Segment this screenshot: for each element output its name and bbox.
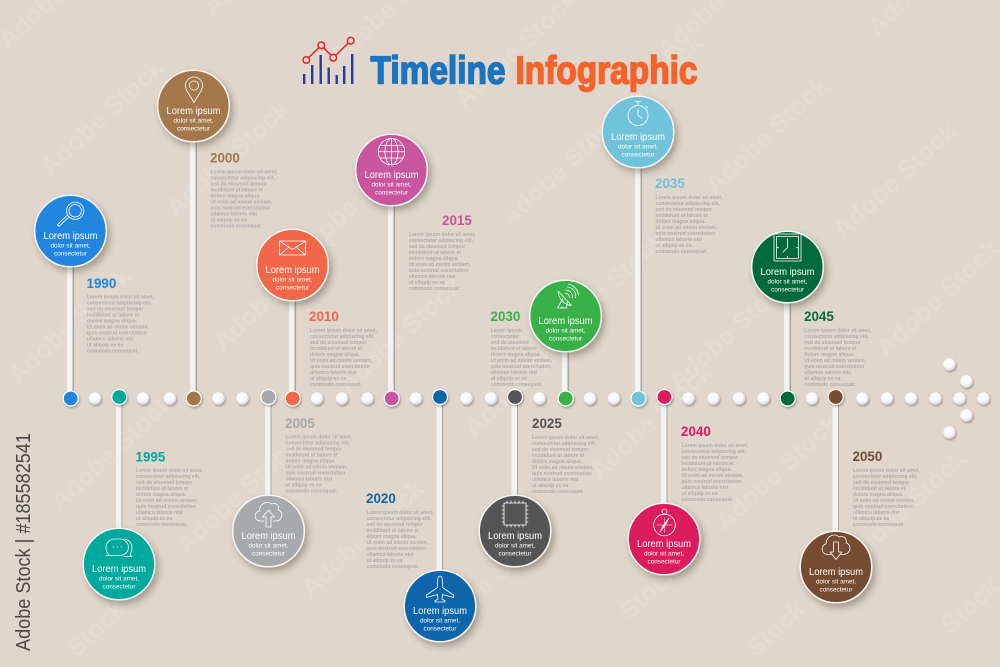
- milestone 2010: consectetur: [276, 284, 310, 292]
- watermark pattern: Adobe Stock: [838, 445, 972, 572]
- text block 2035: ut aliquip ex ea: [656, 243, 692, 249]
- text block 2025: sed do eiusmod tempor: [532, 447, 588, 453]
- text block 2045: ullamco laboris nisi: [804, 370, 852, 376]
- text block 2025: ullamco laboris nisi: [532, 477, 579, 483]
- text block 1995: incididunt ut labore et: [136, 486, 189, 492]
- watermark pattern: Adobe Stock: [333, 272, 467, 399]
- text block 1995: commodo consequat.: [136, 522, 188, 528]
- milestone 2010: [257, 229, 328, 301]
- icon: chat bubbles: [106, 539, 132, 556]
- icon: cloud download: [822, 535, 850, 560]
- text block 2015: ut aliquip ex ea: [409, 280, 445, 286]
- text block 2050: consectetur adipiscing elit,: [853, 474, 918, 480]
- milestone 2025: dolor sit amet,: [495, 542, 535, 550]
- milestone 2045: Lorem ipsum: [760, 267, 814, 278]
- text block 2025: commodo consequat.: [532, 489, 584, 495]
- watermark pattern: Adobe Stock: [35, 54, 169, 181]
- text block 2050: ut aliquip ex ea: [853, 516, 889, 522]
- text block 1990: incididunt ut labore et: [87, 313, 140, 319]
- text block 2015: commodo consequat.: [409, 286, 461, 292]
- icon: stopwatch: [628, 102, 648, 126]
- text block 2020: ut aliquip ex ea: [366, 558, 403, 564]
- text block 2050: Lorem ipsum dolor sit amet,: [853, 468, 921, 474]
- milestone 2000: [158, 70, 229, 142]
- side credit text: Adobe Stock | #185582541: [13, 433, 35, 651]
- milestone 2020: consectetur: [424, 626, 457, 632]
- year 2010: 2010: [309, 309, 339, 324]
- text block 2025: Ut enim ad minim veniam,: [532, 465, 594, 471]
- text block 1995: consectetur adipiscing elit,: [136, 474, 201, 480]
- milestone 1990: dolor sit amet,: [50, 242, 91, 250]
- text block 2025: incididunt ut labore et: [532, 453, 585, 459]
- text block 2040: incididunt ut labore et: [682, 461, 734, 467]
- text block 1995: dolore magna aliqua.: [136, 492, 187, 498]
- text block 2000: sed do eiusmod tempor: [210, 182, 267, 188]
- year 1995: 1995: [136, 450, 166, 464]
- text block 2050: Ut enim ad minim veniam,: [853, 498, 915, 504]
- text block 1990: ut aliquip ex ea: [87, 343, 123, 349]
- text block 1990: sed do eiusmod tempor: [87, 307, 143, 313]
- milestone 2015: [356, 134, 427, 206]
- text block 1995: sed do eiusmod tempor: [136, 480, 192, 486]
- text block 2030: consectetur: [491, 334, 519, 340]
- text block 2015: quis nostrud exercitation: [409, 268, 468, 274]
- milestone 2015: Lorem ipsum: [364, 170, 418, 181]
- text block 2005: commodo consequat.: [286, 489, 338, 495]
- year 2035: 2035: [655, 176, 685, 191]
- text block 2000: quis nostrud exercitation: [210, 206, 270, 212]
- icon: globe: [378, 138, 405, 165]
- milestone 2035: dolor sit amet,: [618, 144, 658, 150]
- watermark pattern: Adobe Stock: [495, 105, 629, 232]
- text block 1995: quis nostrud exercitation: [136, 504, 196, 510]
- text block 2050: dolore magna aliqua.: [853, 492, 904, 498]
- text block 2020: Lorem ipsum dolor sit amet,: [366, 510, 434, 516]
- text block 2025: ut aliquip ex ea: [532, 483, 568, 489]
- text block 1990: Ut enim ad minim veniam,: [87, 325, 149, 331]
- text block 2010: Lorem ipsum dolor sit amet,: [310, 328, 378, 334]
- icon: cloud upload: [255, 502, 282, 527]
- icon: map pin: [186, 77, 202, 103]
- year 2000: 2000: [210, 150, 240, 166]
- icon: envelope: [280, 241, 306, 255]
- text block 2010: dolore magna aliqua.: [310, 352, 361, 358]
- watermark pattern: Adobe Stock: [3, 262, 137, 389]
- year 2040: 2040: [681, 424, 711, 439]
- watermark pattern: Adobe Stock: [171, 432, 305, 559]
- milestone 2035: consectetur: [622, 152, 655, 158]
- text block 2030: ullamco laboris nisi: [491, 370, 538, 376]
- text block 2005: dolore magna aliqua.: [286, 459, 336, 465]
- icon: title chart logo: [303, 37, 354, 84]
- text block 2010: ut aliquip ex ea: [310, 376, 346, 382]
- milestone 2005: [233, 495, 304, 567]
- text block 2000: incididunt ut labore et: [210, 188, 263, 194]
- text block 1990: ullamco laboris nisi: [87, 337, 134, 343]
- text block 2045: quis nostrud exercitation: [804, 364, 864, 370]
- text block 2050: commodo consequat.: [853, 522, 905, 528]
- milestone 2000: consectetur: [177, 126, 211, 132]
- title: Infographic: [516, 50, 698, 92]
- milestone 2050: dolor sit amet,: [816, 578, 856, 586]
- text block 2035: quis nostrud exercitation: [656, 231, 715, 237]
- milestone 2045: dolor sit amet,: [768, 278, 808, 286]
- text block 1990: consectetur adipiscing elit,: [87, 301, 152, 307]
- text block 2005: ut aliquip ex ea: [286, 483, 322, 489]
- milestone 2015: dolor sit amet,: [372, 182, 412, 188]
- text block 2015: dolore magna aliqua.: [409, 256, 459, 262]
- milestone 2030: dolor sit amet,: [546, 328, 586, 334]
- milestone 2035: Lorem ipsum: [611, 132, 665, 143]
- text block 2015: Lorem ipsum dolor sit amet,: [409, 232, 476, 238]
- milestone 2010: Lorem ipsum: [266, 265, 320, 276]
- icon: satellite dish: [558, 284, 578, 308]
- text block 2000: commodo consequat.: [210, 224, 263, 230]
- year 2020: 2020: [366, 491, 396, 506]
- text block 2025: consectetur adipiscing elit,: [532, 441, 597, 447]
- title: Timeline: [370, 50, 506, 92]
- icon: airplane: [426, 576, 454, 602]
- text block 2045: ut aliquip ex ea: [804, 376, 841, 382]
- text block 2045: Ut enim ad minim veniam,: [804, 358, 867, 364]
- text block 2000: ut aliquip ex ea: [210, 218, 247, 224]
- text block 2020: dolore magna aliqua.: [366, 534, 417, 540]
- watermark pattern: Adobe Stock: [286, 140, 420, 267]
- text block 2020: Ut enim ad minim veniam,: [366, 540, 429, 546]
- year 2005: 2005: [285, 416, 315, 431]
- watermark pattern: Adobe Stock: [663, 269, 797, 396]
- text block 2015: consectetur adipiscing elit,: [409, 238, 474, 244]
- milestone 2005: consectetur: [252, 550, 286, 558]
- text block 2010: quis nostrud exercitation: [310, 364, 370, 370]
- text block 2035: Lorem ipsum dolor sit amet,: [656, 195, 723, 201]
- milestone 1995: dolor sit amet,: [99, 576, 139, 582]
- text block 1990: quis nostrud exercitation: [87, 331, 147, 337]
- text block 2000: ullamco laboris nisi: [210, 212, 258, 218]
- text block 2005: quis nostrud exercitation: [286, 471, 345, 477]
- text block 2050: ullamco laboris nisi: [853, 510, 900, 516]
- text block 2005: incididunt ut labore et: [286, 453, 338, 459]
- watermark pattern: Stock: [62, 595, 131, 662]
- text block 2030: incididunt ut labore: [491, 346, 537, 352]
- text block 2030: sed do eiusmod: [491, 340, 529, 346]
- milestone 2005: dolor sit amet,: [248, 542, 289, 550]
- text block 2010: consectetur adipiscing elit,: [310, 334, 375, 340]
- text block 2005: sed do eiusmod tempor: [286, 447, 342, 453]
- year 1990: 1990: [86, 276, 116, 291]
- text block 2025: dolore magna aliqua.: [532, 459, 583, 465]
- text block 2050: quis nostrud exercitation: [853, 504, 913, 510]
- icon: compass: [654, 509, 675, 536]
- milestone 2040: dolor sit amet,: [644, 550, 684, 558]
- icon: magnifier: [57, 202, 84, 226]
- milestone 2020: Lorem ipsum: [413, 606, 467, 617]
- year 2045: 2045: [804, 309, 834, 324]
- text block 2050: incididunt ut labore et: [853, 486, 906, 492]
- milestone 2000: dolor sit amet,: [174, 118, 214, 124]
- year 2030: 2030: [490, 309, 520, 324]
- milestone 2000: Lorem ipsum: [166, 106, 220, 117]
- title: [370, 50, 698, 92]
- milestone 2025: [479, 495, 551, 567]
- timeline coloured markers: [63, 390, 843, 406]
- text block 2010: ullamco laboris nisi: [310, 370, 357, 376]
- text block 2030: ut aliquip ex ea: [491, 376, 527, 382]
- milestone 2010: dolor sit amet,: [272, 276, 313, 284]
- icon: wall clock: [774, 234, 801, 261]
- text block 2005: ullamco laboris nisi: [286, 477, 333, 483]
- text block 2010: sed do eiusmod tempor: [310, 340, 366, 346]
- watermark pattern: Adobe Stock: [828, 117, 962, 244]
- watermark pattern: Adobe Stock: [45, 389, 179, 516]
- text block 2035: commodo consequat.: [656, 249, 708, 255]
- text block 2010: Ut enim ad minim veniam,: [310, 358, 372, 364]
- milestone 2020: dolor sit amet,: [420, 618, 460, 624]
- milestone 2005: Lorem ipsum: [242, 531, 296, 542]
- milestone 2050: [800, 531, 872, 603]
- text block 1995: Ut enim ad minim veniam,: [136, 498, 198, 504]
- text block 2020: ullamco laboris nisi: [366, 552, 414, 558]
- text block 2015: incididunt ut labore et: [409, 250, 461, 256]
- text block 2000: Lorem ipsum dolor sit amet,: [210, 170, 278, 176]
- text block 2030: dolore magna aliqua.: [491, 352, 541, 358]
- text block 2040: consectetur adipiscing elit,: [682, 449, 747, 455]
- text block 2040: Lorem ipsum dolor sit amet,: [682, 443, 749, 449]
- text block 2000: dolore magna aliqua.: [210, 194, 261, 200]
- text block 2045: incididunt ut labore et: [804, 346, 857, 352]
- text block 2015: Ut enim ad minim veniam,: [409, 262, 471, 268]
- text block 2040: ullamco laboris nisi: [682, 485, 729, 491]
- text block 2020: consectetur adipiscing elit,: [366, 516, 432, 522]
- text block 2010: commodo consequat.: [310, 382, 362, 388]
- text block 2020: sed do eiusmod tempor: [366, 522, 423, 528]
- text block 2040: commodo consequat.: [682, 497, 734, 503]
- milestone 2025: consectetur: [498, 550, 532, 558]
- milestone 2030: [530, 280, 601, 352]
- milestone 2045: consectetur: [771, 286, 805, 294]
- text block 2005: Ut enim ad minim veniam,: [286, 465, 348, 471]
- watermark pattern: Adobe Stock: [459, 315, 593, 442]
- timeline white dots: [89, 392, 869, 405]
- watermark pattern: Adobe Stock: [871, 235, 1000, 362]
- text block 2035: incididunt ut labore et: [656, 213, 708, 219]
- text block 2045: Lorem ipsum dolor sit amet,: [804, 328, 872, 334]
- text block 2030: commodo consequat.: [491, 382, 543, 388]
- text block 2000: Ut enim ad minim veniam,: [210, 200, 273, 206]
- text block 2035: consectetur adipiscing elit,: [656, 201, 721, 207]
- watermark pattern: Stock: [741, 595, 810, 662]
- text block 1995: ut aliquip ex ea: [136, 516, 172, 522]
- text block 2040: quis nostrud exercitation: [682, 479, 741, 485]
- milestone 2050: consectetur: [820, 586, 853, 594]
- milestone 2035: [602, 96, 674, 168]
- text block 2050: sed do eiusmod tempor: [853, 480, 909, 486]
- text block 2030: quis nostrud exercitation: [491, 364, 550, 370]
- milestone 1995: Lorem ipsum: [92, 564, 146, 575]
- arrow made of dots: [881, 358, 990, 439]
- milestone 2040: Lorem ipsum: [637, 539, 691, 550]
- watermark pattern: Adobe Stock: [700, 72, 834, 199]
- watermark pattern: Adobe Stock: [161, 95, 295, 222]
- text block 2035: dolore magna aliqua.: [656, 219, 706, 225]
- text block 2040: dolore magna aliqua.: [682, 467, 732, 473]
- milestone 2045: [752, 231, 823, 303]
- milestone 1995: consectetur: [102, 584, 136, 590]
- text block 1995: Lorem ipsum dolor sit amet,: [136, 468, 204, 474]
- text block 2020: quis nostrud exercitation: [366, 546, 426, 552]
- milestone 2030: consectetur: [549, 336, 583, 342]
- text block 2040: Ut enim ad minim veniam,: [682, 473, 744, 479]
- watermark pattern: Adobe Stock: [296, 475, 430, 602]
- text block 2005: Lorem ipsum dolor sit amet,: [286, 435, 353, 441]
- text block 2000: consectetur adipiscing elit,: [210, 176, 276, 182]
- text block 2030: Lorem ipsum: [491, 328, 523, 334]
- text block 2025: quis nostrud exercitation: [532, 471, 592, 477]
- watermark pattern: Adobe Stock: [537, 226, 671, 353]
- text block 2015: sed do eiusmod tempor: [409, 244, 465, 250]
- milestone 1990: Lorem ipsum: [44, 231, 98, 242]
- watermark pattern: Adobe Stock: [422, 518, 556, 645]
- text block 1990: commodo consequat.: [87, 349, 139, 355]
- text block 2030: Ut enim ad minim veniam,: [491, 358, 553, 364]
- watermark pattern: Adobe Stock: [575, 29, 709, 156]
- text block 2045: consectetur adipiscing elit,: [804, 334, 869, 340]
- stems connecting bubbles to the timeline: [67, 140, 839, 574]
- year 2025: 2025: [532, 416, 562, 431]
- milestone 2025: Lorem ipsum: [488, 531, 542, 542]
- text block 2015: ullamco laboris nisi: [409, 274, 456, 280]
- milestone 2015: consectetur: [375, 190, 409, 196]
- milestone 2020: [404, 570, 476, 642]
- milestone 1990: consectetur: [54, 250, 88, 258]
- text block 2010: incididunt ut labore et: [310, 346, 363, 352]
- text block 1990: Lorem ipsum dolor sit amet,: [87, 295, 155, 301]
- milestone 1990: [35, 195, 106, 267]
- watermark pattern: Adobe Stock: [710, 409, 844, 536]
- text block 2035: Ut enim ad minim veniam,: [656, 225, 718, 231]
- text block 2045: commodo consequat.: [804, 382, 857, 388]
- text block 1990: dolore magna aliqua.: [87, 319, 138, 325]
- watermark pattern: Adobe Stock: [584, 358, 718, 485]
- text block 2020: incididunt ut labore et: [366, 528, 419, 534]
- milestone 1995: [83, 528, 155, 600]
- milestone 2050: Lorem ipsum: [809, 567, 863, 578]
- text block 2035: ullamco laboris nisi: [656, 237, 703, 243]
- watermark pattern: Stock: [615, 558, 684, 625]
- text block 2040: ut aliquip ex ea: [682, 491, 718, 497]
- text block 2005: consectetur adipiscing elit,: [286, 441, 351, 447]
- text block 2020: commodo consequat.: [366, 564, 419, 570]
- milestone 2040: consectetur: [648, 558, 681, 566]
- text block 2025: Lorem ipsum dolor sit amet,: [532, 435, 600, 441]
- year 2015: 2015: [442, 213, 472, 228]
- text block 2045: sed do eiusmod tempor: [804, 340, 861, 346]
- milestone 2040: [628, 503, 700, 575]
- watermark pattern: Adobe Stock: [208, 229, 342, 356]
- year 2050: 2050: [852, 449, 882, 464]
- milestone 2030: Lorem ipsum: [538, 316, 592, 327]
- text block 2035: sed do eiusmod tempor: [656, 207, 712, 213]
- text block 1995: ullamco laboris nisi: [136, 510, 183, 516]
- text block 2045: dolore magna aliqua.: [804, 352, 855, 358]
- text block 2040: sed do eiusmod tempor: [682, 455, 738, 461]
- icon: microchip: [502, 501, 528, 527]
